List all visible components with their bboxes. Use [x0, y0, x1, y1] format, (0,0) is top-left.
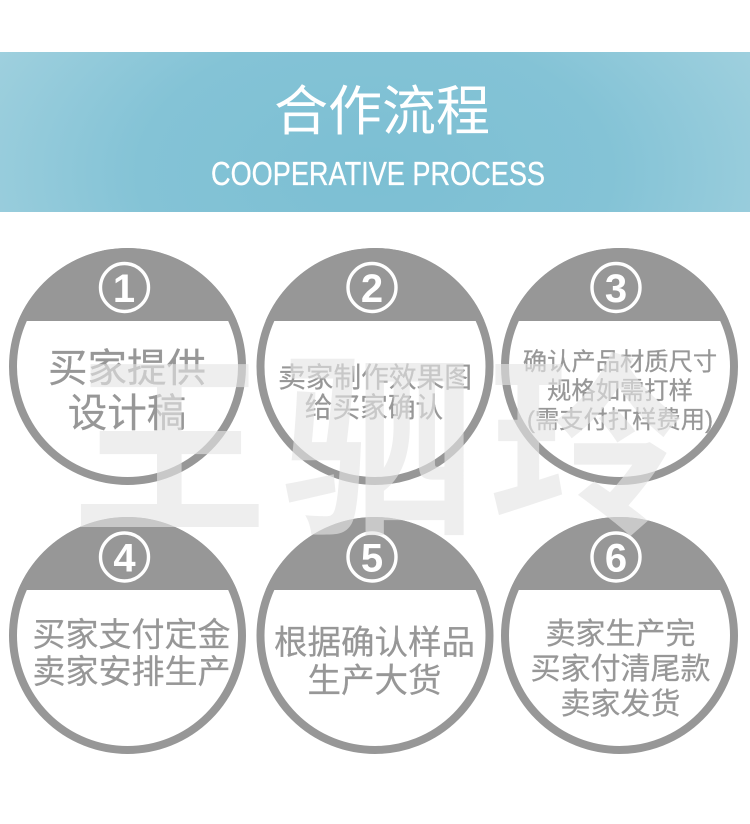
step 2 number [348, 264, 396, 312]
step 4 number [100, 533, 148, 581]
step 4 text: 买家支付定金 [32, 616, 230, 653]
step 3 text: 确认产品材质尺寸 [523, 349, 717, 376]
title: 合作流程 [274, 82, 490, 142]
step 4 number: 4 [113, 536, 136, 580]
step 3 number [592, 264, 640, 312]
step 5 [250, 517, 500, 750]
step 3 [495, 248, 750, 481]
step 2 number: 2 [361, 267, 383, 311]
step 4 [0, 517, 255, 750]
step 1 text: 买家提供 [48, 347, 206, 391]
step 5 text: 生产大货 [308, 663, 442, 700]
step 6 text: 卖家发货 [560, 688, 680, 721]
step 6 text: 买家付清尾款 [530, 653, 710, 686]
step 5 text: 根据确认样品 [274, 625, 475, 662]
step 6 number [592, 533, 640, 581]
step 4 text: 卖家安排生产 [32, 653, 230, 690]
step 1 [0, 248, 255, 481]
step 2 [250, 248, 500, 481]
step 3 text: (需支付打样费用) [527, 407, 713, 434]
step 6 number: 6 [605, 536, 627, 580]
step 2 text: 卖家制作效果图 [278, 362, 472, 393]
step 3 text: 规格如需打样 [547, 378, 693, 405]
step 5 number [348, 533, 396, 581]
step 3 number: 3 [605, 267, 627, 311]
watermark: 王驷玲 [72, 342, 684, 560]
step 6 [495, 517, 750, 750]
step 1 number [100, 264, 148, 312]
header banner [0, 52, 750, 212]
step 1 text: 设计稿 [68, 392, 186, 436]
step 1 number: 1 [113, 267, 135, 311]
step 2 text: 给买家确认 [305, 392, 443, 423]
subtitle: COOPERATIVE PROCESS [211, 155, 545, 192]
step 6 text: 卖家生产完 [546, 618, 696, 651]
step 5 number: 5 [361, 536, 383, 580]
